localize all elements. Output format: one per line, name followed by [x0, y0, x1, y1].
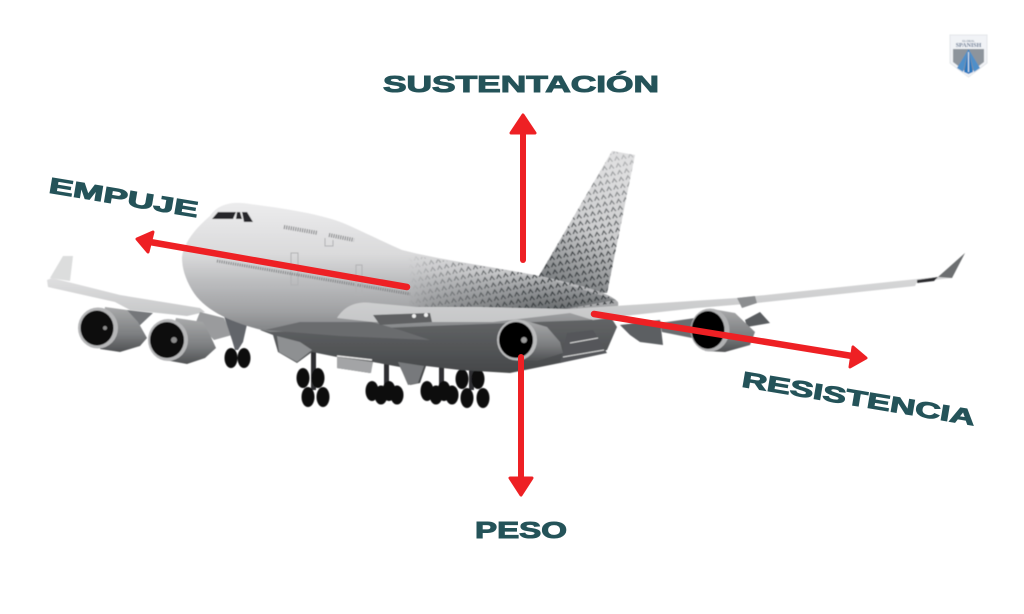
near (right) wing — [337, 253, 965, 325]
flaps right side — [560, 312, 770, 363]
main landing gear — [296, 345, 490, 408]
tail fin — [539, 151, 635, 293]
fuselage doors — [291, 238, 362, 295]
far engine 1 — [78, 307, 147, 352]
far engine 2 — [148, 318, 216, 364]
arrow: peso (down) — [510, 357, 532, 495]
label: resistencia: RESISTENCIA — [740, 367, 977, 430]
near engine 1 — [497, 320, 563, 361]
nose landing gear — [224, 316, 250, 368]
arrow: resistencia (right) — [594, 314, 866, 367]
fuselage — [182, 203, 618, 340]
label: peso: PESO — [475, 517, 567, 543]
cabin windows — [217, 227, 410, 294]
belly underside and gear fairings — [260, 300, 617, 385]
logo: shield badge — [950, 35, 987, 77]
logo: shield badge: GLOBAL — [962, 39, 975, 43]
label: empuje: EMPUJE — [47, 173, 200, 222]
label: sustentación: SUSTENTACIÓN — [383, 70, 659, 97]
arrow: empuje (left) — [137, 232, 407, 287]
arrow: sustentación (up) — [511, 115, 535, 260]
cockpit windows — [212, 212, 253, 222]
far (left) wing with winglet — [47, 256, 232, 340]
logo: shield badge: SPANISH — [956, 43, 982, 49]
near engine 2 — [690, 308, 755, 352]
airplane — [47, 151, 965, 408]
